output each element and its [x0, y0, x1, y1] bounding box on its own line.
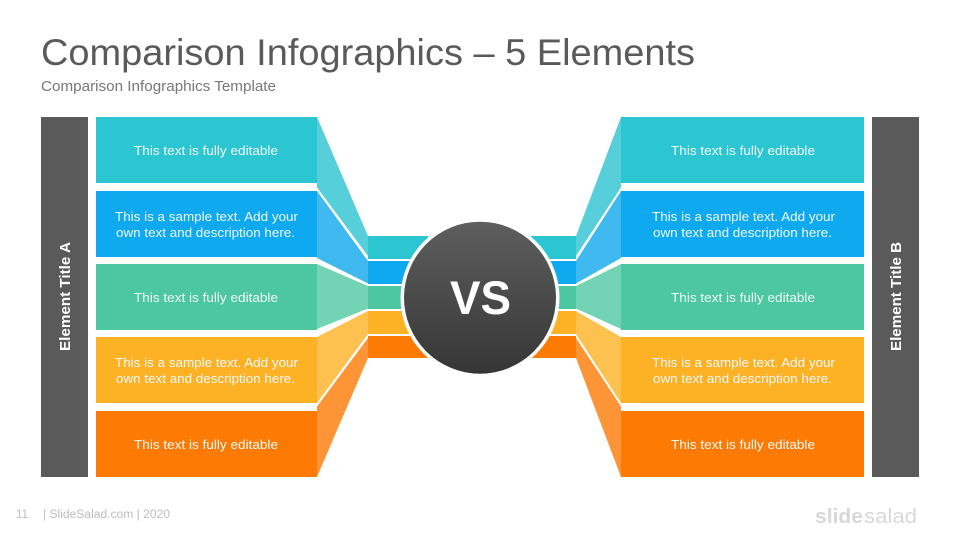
footer text: | SlideSalad.com | 2020 [43, 509, 170, 521]
subtitle: Comparison Infographics Template [41, 79, 276, 95]
right box 2: own text and description here. [653, 225, 832, 240]
panel: element title A [41, 117, 88, 477]
logo: slidesalad: slide [815, 506, 863, 528]
right box 4: own text and description here. [653, 371, 832, 386]
right connector: blue [540, 191, 621, 284]
left box 3: This text is fully editable [134, 290, 278, 305]
panel: element title A: Element Title A [58, 241, 74, 351]
left connector: green [317, 264, 418, 329]
left connector: blue [317, 191, 418, 284]
left box 4: own text and description here. [116, 371, 295, 386]
left box 4 [96, 337, 317, 403]
VS badge [400, 218, 560, 377]
left box 1: This text is fully editable [134, 143, 278, 158]
right box 5 [621, 411, 864, 477]
panel: right column [520, 117, 864, 477]
left box 1 [96, 117, 317, 183]
right box 1 [621, 117, 864, 183]
panel: left column [96, 117, 428, 477]
right box 5: This text is fully editable [671, 437, 815, 452]
left box 5 [96, 411, 317, 477]
right connector: orange [520, 336, 621, 477]
left box 5: This text is fully editable [134, 437, 278, 452]
right box 2: This is a sample text. Add your [652, 209, 836, 224]
left box 2: own text and description here. [116, 225, 295, 240]
title: Comparison Infographics – 5 Elements [41, 32, 695, 73]
right box 3: This text is fully editable [671, 290, 815, 305]
right box 4: This is a sample text. Add your [652, 355, 836, 370]
page number: 11 [16, 509, 28, 521]
panel: element title B [872, 117, 919, 477]
VS badge: VS [450, 271, 511, 324]
panel: element title B: Element Title B [889, 242, 905, 351]
right box 3 [621, 264, 864, 330]
logo: slidesalad: salad [864, 506, 917, 528]
left connector: orange [317, 336, 428, 477]
left connector: teal [317, 117, 428, 259]
right box 2 [621, 191, 864, 257]
left box 4: This is a sample text. Add your [115, 355, 299, 370]
right box 1: This text is fully editable [671, 143, 815, 158]
left box 3 [96, 264, 317, 330]
right connector: green [540, 264, 621, 329]
logo: slidesalad [815, 506, 917, 528]
left connector: yellow [317, 311, 418, 403]
left box 2 [96, 191, 317, 257]
left box 2: This is a sample text. Add your [115, 209, 299, 224]
right box 4 [621, 337, 864, 403]
right connector: teal [520, 117, 621, 259]
right connector: yellow [540, 311, 621, 403]
